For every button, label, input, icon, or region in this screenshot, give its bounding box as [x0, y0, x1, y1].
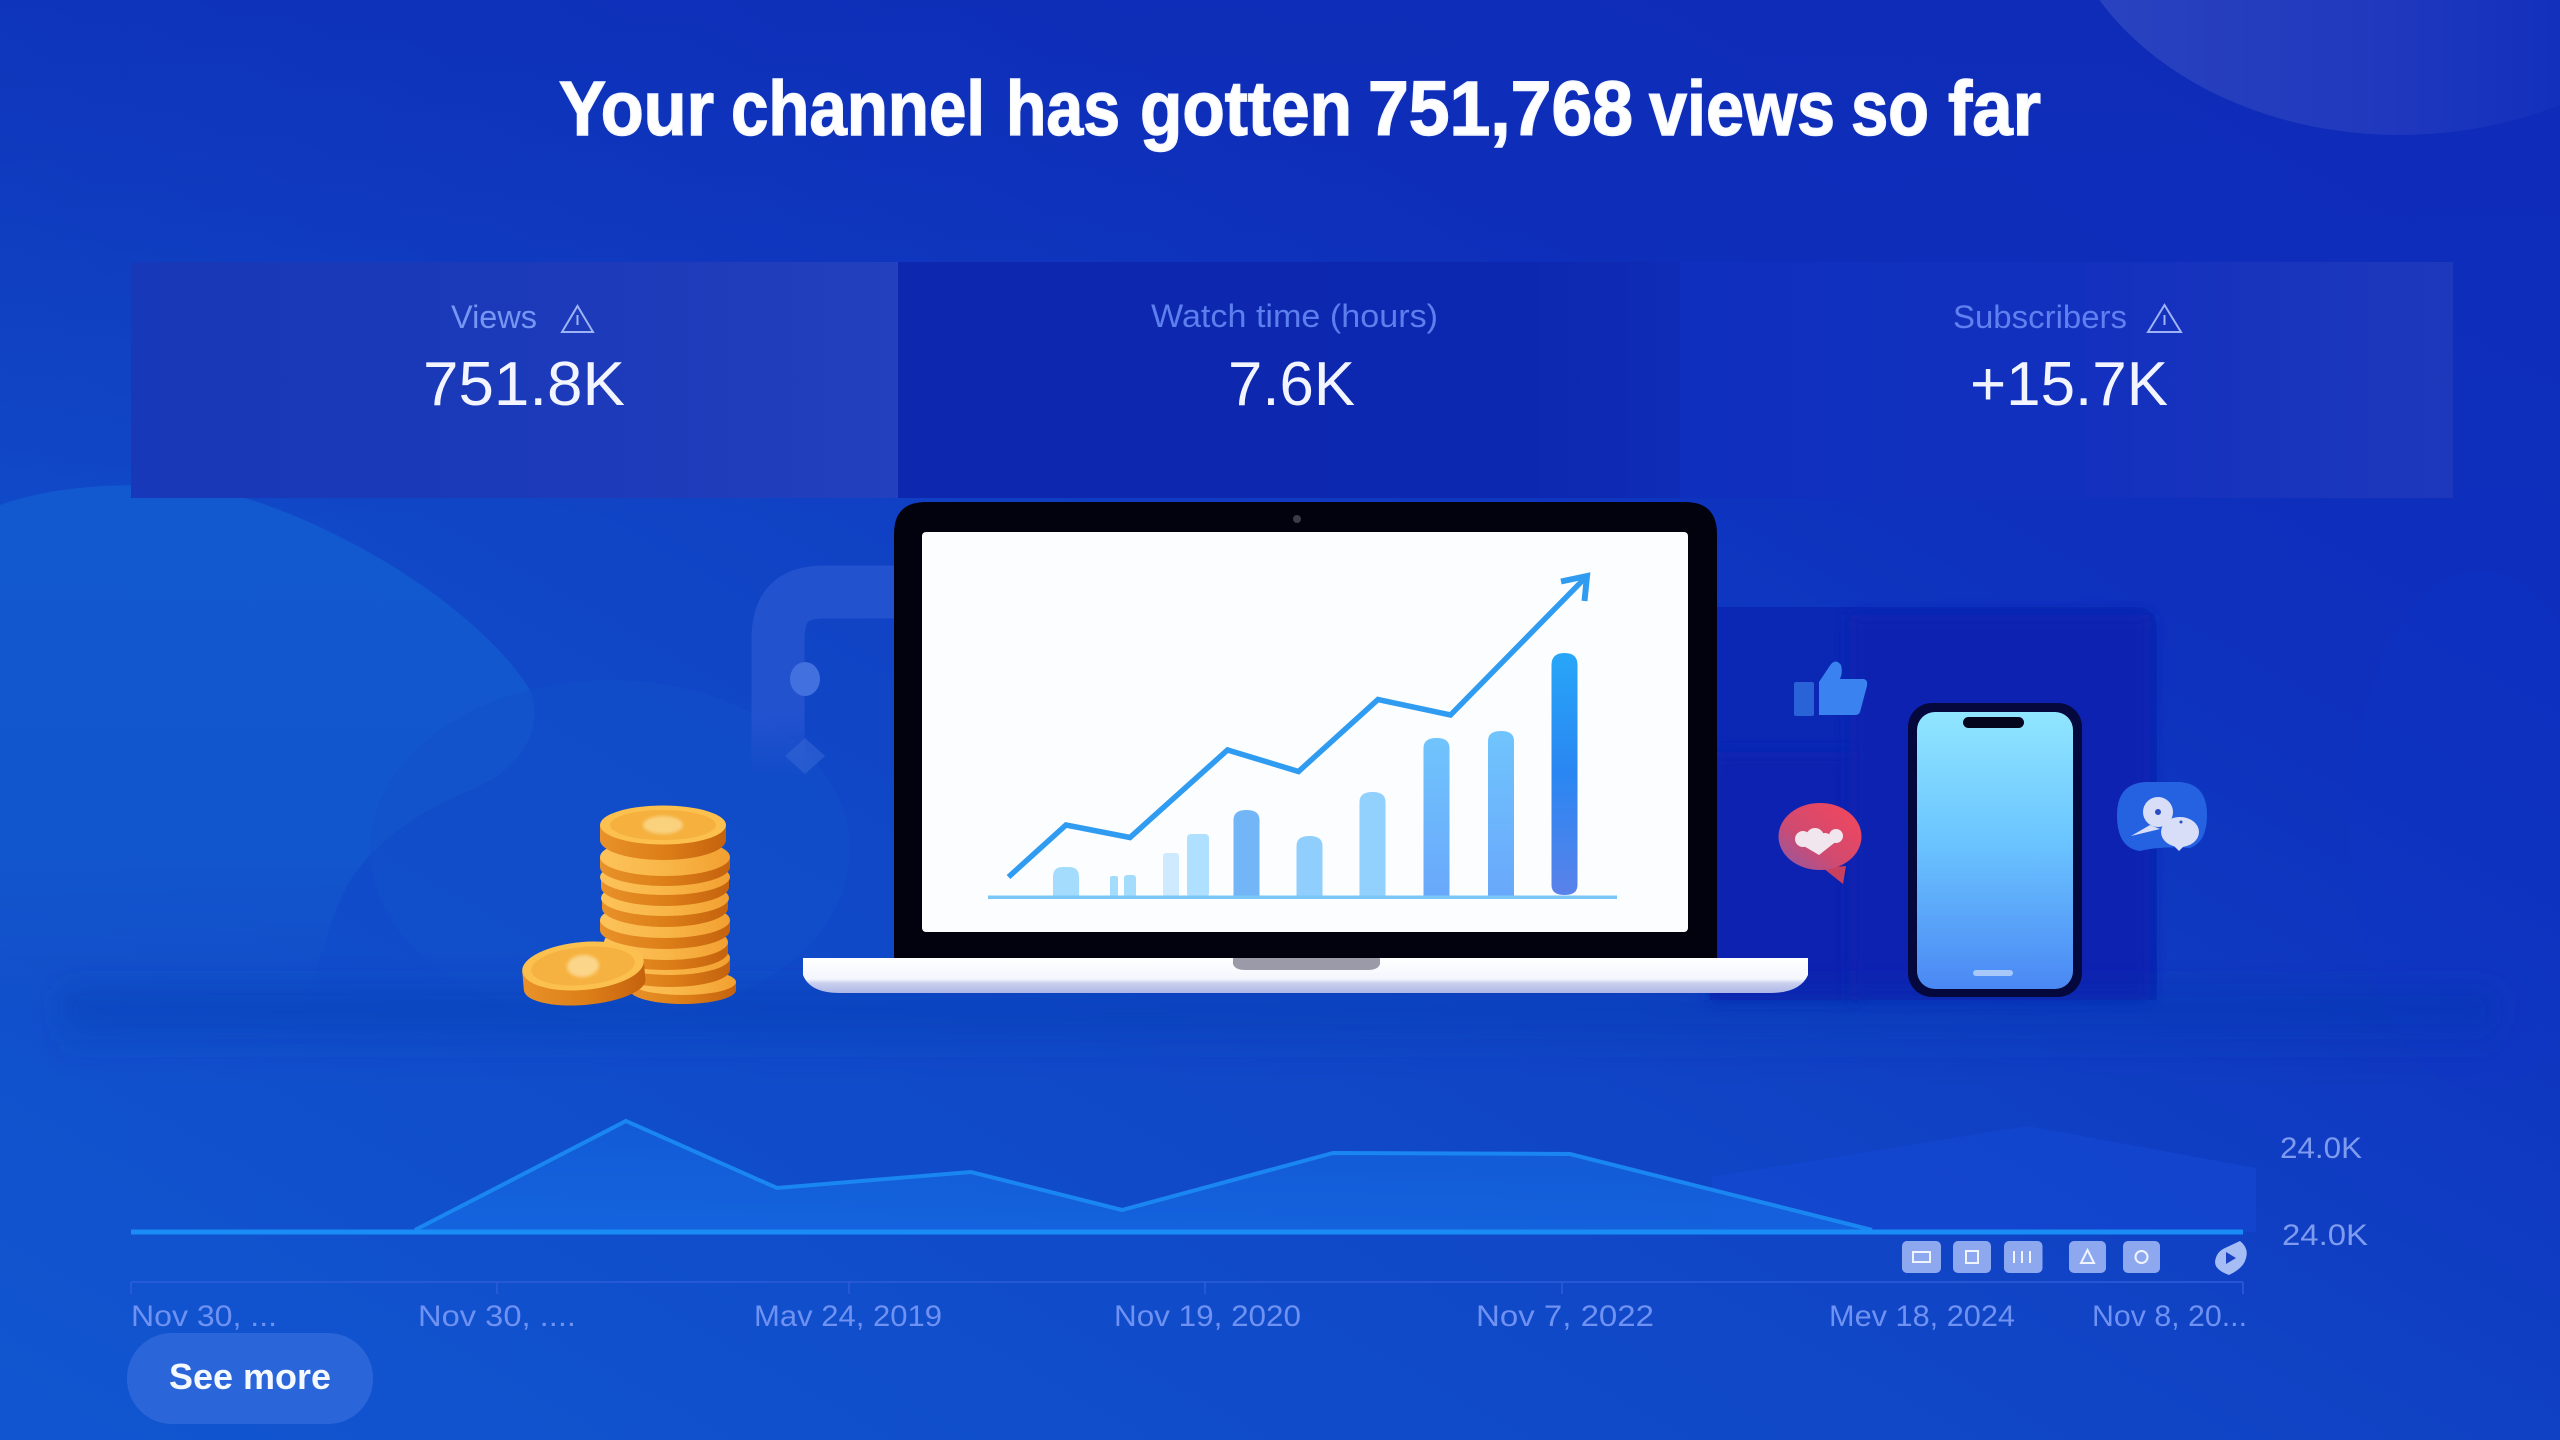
axis line: [131, 1282, 2243, 1294]
x axis labels: Nov 19, 2020: [1114, 1300, 1301, 1333]
panel: views: [131, 262, 898, 498]
decorative phone outline behind laptop: [778, 592, 900, 775]
x axis labels: Mev 18, 2024: [1829, 1300, 2015, 1333]
phone home bar: [1973, 970, 2013, 976]
y axis labels: 24.0K: [2282, 1219, 2368, 1252]
title: Your: [559, 66, 714, 152]
x axis labels: Nov 30, ...: [131, 1300, 277, 1333]
y axis labels: 24.0K: [2280, 1132, 2362, 1165]
area chart: [131, 1121, 2368, 1333]
area line: [415, 1121, 1872, 1230]
icon: coin stack: [520, 806, 736, 1010]
x axis labels: Nov 7, 2022: [1476, 1300, 1654, 1333]
chart bars: [1053, 653, 1578, 897]
title: views: [1649, 66, 1835, 152]
laptop screen: [922, 532, 1688, 932]
x axis labels: [131, 1300, 2247, 1333]
panel: subscribers: [1680, 262, 2453, 498]
laptop base: [803, 958, 1808, 993]
area fill: [415, 1121, 1872, 1230]
small platform icons: [1902, 1241, 2247, 1275]
phone screen: [1917, 712, 2073, 989]
title: far: [1948, 66, 2041, 152]
y axis labels: [2280, 1132, 2368, 1252]
title: 751,768: [1368, 66, 1633, 152]
views value: 751.8K: [423, 350, 625, 419]
title: has: [1006, 66, 1120, 152]
x axis labels: Nov 30, ....: [418, 1300, 576, 1333]
x axis labels: Nov 8, 20...: [2092, 1300, 2247, 1333]
see more button: See more: [169, 1356, 331, 1397]
stacked coins: [600, 806, 736, 1004]
title: channel: [731, 66, 985, 152]
laptop lid: [894, 502, 1717, 962]
views label: Views: [451, 299, 537, 335]
panel behind phone: [1710, 607, 2157, 1000]
icon: warning triangle: [2148, 305, 2181, 332]
phone body: [1908, 703, 2082, 997]
phone island: [1963, 717, 2024, 728]
chart baseline: [988, 896, 1617, 899]
background area: [1712, 1126, 2256, 1232]
baseline: [131, 1230, 2243, 1234]
icon: thumbs up: [1794, 661, 1867, 716]
panel: watch time: [898, 262, 1680, 498]
icon: chat bubbles: [2117, 782, 2207, 851]
icon: phone: [1908, 703, 2082, 997]
icon: heart speech bubble: [1778, 803, 1862, 884]
floor shadow: [60, 990, 2500, 1060]
icon: warning triangle: [562, 306, 593, 332]
watch time label: Watch time (hours): [1151, 298, 1438, 334]
webcam: [1293, 515, 1301, 523]
flat coin: [520, 937, 647, 1010]
trackpad notch: [1233, 958, 1380, 970]
subscribers value: +15.7K: [1970, 350, 2168, 419]
x axis labels: Mav 24, 2019: [754, 1300, 942, 1333]
title: so: [1851, 66, 1929, 152]
subscribers label: Subscribers: [1953, 299, 2127, 335]
trend arrow: [1008, 576, 1587, 877]
title: [559, 66, 2041, 152]
laptop: [803, 502, 1808, 993]
title: gotten: [1140, 66, 1352, 152]
see more button: [127, 1333, 373, 1424]
watch time value: 7.6K: [1228, 350, 1355, 419]
growth chart on screen: [988, 576, 1617, 899]
